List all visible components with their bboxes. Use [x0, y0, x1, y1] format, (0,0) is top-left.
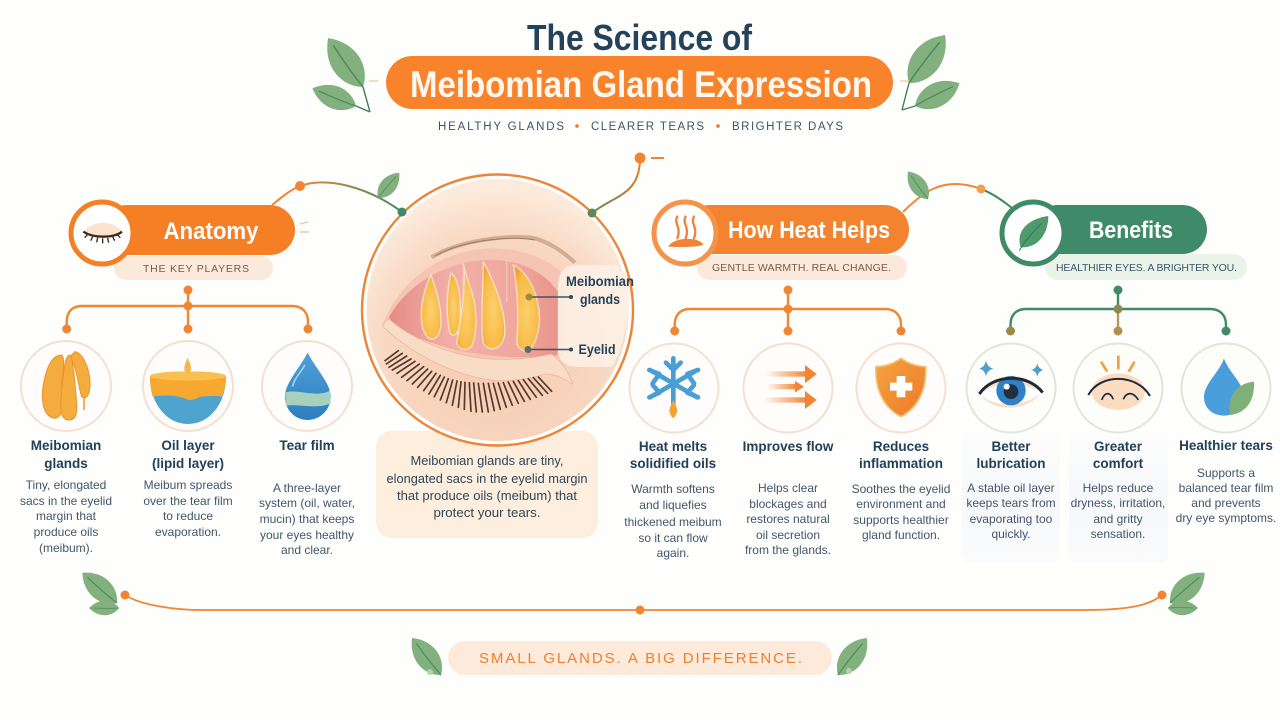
item: Improves flow — [743, 344, 834, 557]
callout labels panel — [558, 265, 630, 367]
pointer: Meibomian glands: Meibomian — [566, 273, 634, 289]
icon: closed eye — [83, 223, 122, 243]
item: Heat melts solidified oils: thickened meibum — [624, 515, 722, 529]
item: Reduces inflammation: environment and — [856, 497, 946, 511]
pointer: Meibomian glands: glands — [580, 291, 620, 307]
item: Tear film: A three-layer — [273, 481, 341, 495]
eyelashes — [385, 351, 552, 412]
icon: glands — [42, 352, 90, 420]
item: Better lubrication — [962, 344, 1060, 563]
lower lid — [382, 319, 572, 384]
icon: oil bowl — [150, 358, 226, 424]
item: Improves flow: Helps clear — [758, 481, 818, 495]
item: Oil layer: evaporation. — [155, 525, 221, 539]
item: Heat melts solidified oils: and liquefies — [639, 498, 707, 512]
item: Heat melts solidified oils: Warmth softens — [631, 482, 715, 496]
item: Heat melts solidified oils: so it can flow — [638, 531, 708, 545]
item: Meibomian glands: margin that — [36, 509, 97, 523]
brow crease — [432, 237, 575, 263]
footer banner: SMALL GLANDS. A BIG DIFFERENCE. — [479, 650, 802, 667]
item: Improves flow: from the glands. — [745, 543, 831, 557]
item: Oil layer: to reduce — [163, 509, 213, 523]
item: Greater comfort: and gritty — [1093, 512, 1143, 526]
item: Meibomian glands — [20, 341, 112, 555]
anatomy header: THE KEY PLAYERS — [143, 263, 249, 275]
icon: flow arrows — [763, 365, 817, 409]
footer banner — [448, 641, 832, 675]
item: Better lubrication: evaporating too — [970, 512, 1053, 526]
item: Healthier tears: and prevents — [1191, 496, 1261, 510]
item: Meibomian glands: sacs in the eyelid — [20, 494, 112, 508]
pointer: Eyelid: Eyelid — [578, 341, 616, 357]
item: Heat melts solidified oils: solidified oils — [630, 456, 716, 471]
bottom divider — [75, 564, 1212, 615]
pointer: Meibomian glands — [526, 273, 634, 307]
connector: centre to top dot — [588, 152, 664, 218]
icon: layered tear drop — [285, 353, 331, 420]
title banner — [386, 56, 893, 109]
title: The Science of: The Science of — [527, 17, 753, 58]
centre eye illustration — [362, 174, 634, 446]
item: Reduces inflammation — [852, 344, 950, 542]
item: Greater comfort: Helps reduce — [1083, 481, 1154, 495]
item: Better lubrication: quickly. — [991, 527, 1031, 541]
item: Oil layer: Meibum spreads — [144, 478, 232, 492]
item: Improves flow: oil secretion — [756, 528, 820, 542]
item: Oil layer: Oil layer — [161, 438, 215, 453]
item: Tear film: your eyes healthy — [260, 528, 354, 542]
tagline: CLEARER TEARS — [591, 121, 704, 133]
connector: anatomy to centre — [272, 168, 406, 216]
item: Better lubrication: keeps tears from — [966, 496, 1056, 510]
tagline — [438, 121, 843, 133]
icon: footer leaf right — [829, 631, 876, 682]
heat tree connector — [670, 286, 906, 336]
icon: comfortable eyes — [1088, 357, 1150, 410]
item: Heat melts solidified oils: Heat melts — [639, 439, 707, 454]
item: Healthier tears — [1176, 344, 1276, 525]
item: Tear film: mucin) that keeps — [260, 512, 354, 526]
icon: shield — [876, 358, 926, 417]
icon: title leaves left — [308, 30, 378, 116]
item: Reduces inflammation: inflammation — [859, 456, 943, 471]
icon: steam — [668, 217, 703, 247]
item: Healthier tears: dry eye symptoms. — [1176, 511, 1276, 525]
connector: heat to benefits — [901, 167, 1012, 212]
item: Reduces inflammation: Soothes the eyelid — [852, 482, 950, 496]
item: Greater comfort: dryness, irritation, — [1071, 496, 1165, 510]
eyelid pink area — [382, 248, 563, 358]
item: Better lubrication: Better — [991, 439, 1031, 454]
icon: snowflake — [649, 358, 698, 418]
item: Reduces inflammation: supports healthier — [853, 513, 949, 527]
item: Improves flow: blockages and — [749, 497, 827, 511]
pointer: Eyelid — [524, 341, 616, 357]
item: Improves flow: Improves flow — [743, 439, 834, 454]
item: Reduces inflammation: gland function. — [862, 528, 940, 542]
icon: drop with leaf — [1204, 358, 1254, 416]
item: Meibomian glands: Tiny, elongated — [26, 478, 106, 492]
item: Oil layer — [143, 341, 233, 539]
heat header: How Heat Helps — [728, 217, 890, 244]
benefits tree connector — [1006, 286, 1230, 336]
caption panel: protect your tears. — [434, 505, 540, 520]
item: Tear film: Tear film — [279, 438, 335, 453]
heat header: GENTLE WARMTH. REAL CHANGE. — [712, 262, 891, 274]
anatomy header — [71, 202, 309, 280]
item: Meibomian glands: produce oils — [34, 525, 98, 539]
item: Meibomian glands: Meibomian — [31, 438, 101, 453]
panel: anatomy — [20, 202, 355, 557]
icon: leaf — [1019, 216, 1048, 251]
item: Improves flow: restores natural — [746, 512, 830, 526]
item: Greater comfort: sensation. — [1091, 527, 1145, 541]
tagline: BRIGHTER DAYS — [732, 121, 843, 133]
glands — [421, 262, 539, 351]
gland channels — [463, 261, 507, 345]
icon: footer leaf left — [403, 631, 450, 682]
item: Healthier tears: balanced tear film — [1179, 481, 1273, 495]
benefits header — [1002, 202, 1247, 280]
item: Heat melts solidified oils — [624, 344, 722, 560]
item: Greater comfort: Greater — [1094, 439, 1143, 454]
item: Oil layer: over the tear film — [143, 494, 233, 508]
item: Reduces inflammation: Reduces — [873, 439, 929, 454]
item: Oil layer: (lipid layer) — [152, 456, 224, 471]
title banner: Meibomian Gland Expression — [410, 64, 872, 105]
title block — [386, 17, 893, 133]
benefits header: Benefits — [1089, 217, 1173, 244]
panel: how heat helps — [624, 202, 950, 560]
item: Greater comfort: comfort — [1093, 456, 1144, 471]
item: Better lubrication: lubrication — [976, 456, 1046, 471]
caption panel — [376, 431, 598, 538]
item: Tear film: and clear. — [281, 543, 333, 557]
item: Heat melts solidified oils: again. — [657, 546, 689, 560]
icon: open eye — [979, 361, 1043, 408]
benefits header: HEALTHIER EYES. A BRIGHTER YOU. — [1056, 262, 1237, 274]
icon: title leaves right — [897, 26, 965, 117]
item: Tear film — [259, 341, 355, 557]
anatomy header: Anatomy — [164, 218, 259, 245]
item: Healthier tears: Healthier tears — [1179, 438, 1273, 453]
item: Greater comfort — [1069, 344, 1168, 563]
anatomy tree connector — [62, 286, 312, 334]
item: Healthier tears: Supports a — [1197, 466, 1255, 480]
item: Tear film: system (oil, water, — [259, 496, 355, 510]
tagline: HEALTHY GLANDS — [438, 121, 564, 133]
caption panel: that produce oils (meibum) that — [397, 488, 577, 503]
item: Better lubrication: A stable oil layer — [967, 481, 1055, 495]
heat header — [654, 202, 909, 280]
item: Meibomian glands: glands — [44, 456, 88, 471]
caption panel: elongated sacs in the eyelid margin — [386, 471, 588, 486]
panel: benefits — [962, 202, 1276, 563]
item: Meibomian glands: (meibum). — [39, 541, 93, 555]
caption panel: Meibomian glands are tiny, — [410, 453, 564, 468]
